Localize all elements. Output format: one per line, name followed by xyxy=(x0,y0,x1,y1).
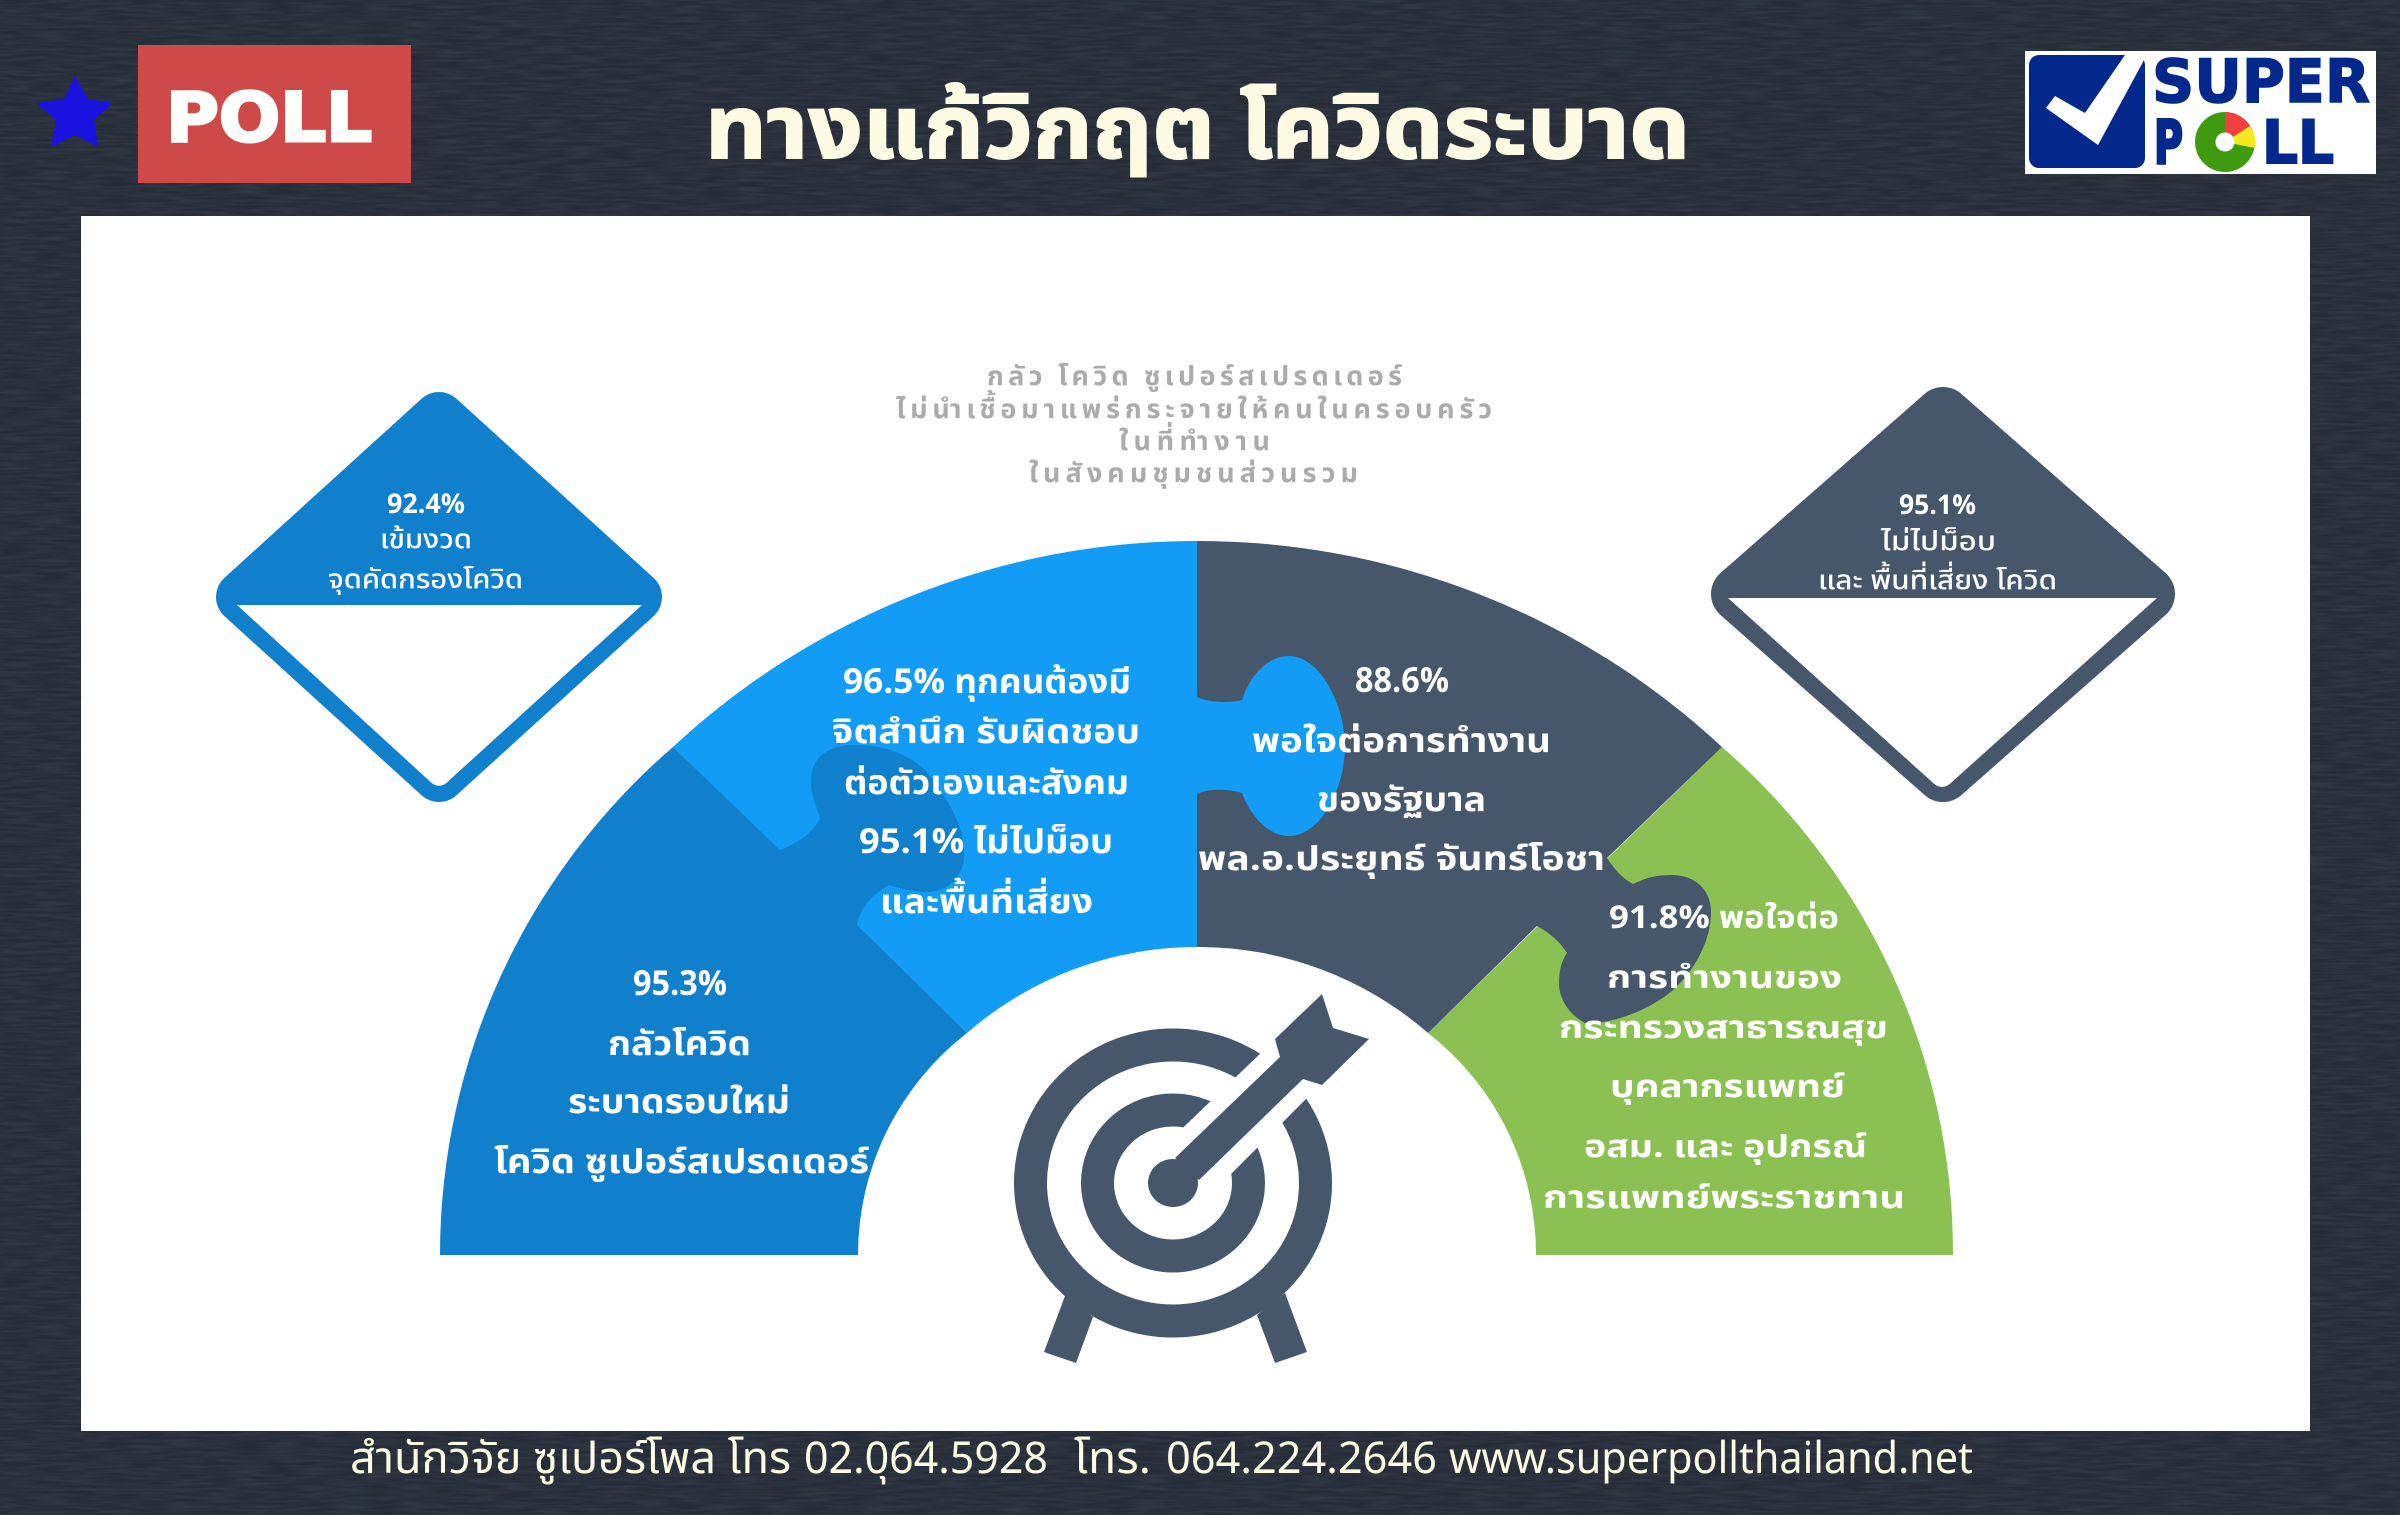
text: light blue segment: 95.1% ไม่ไปม็อบ xyxy=(859,818,1113,869)
diamond: right callout xyxy=(1728,415,2157,787)
text: light blue segment xyxy=(832,658,1140,929)
text: slate segment: พอใจต่อการทำงาน xyxy=(1252,717,1551,768)
puzzle arc: slate segment xyxy=(1197,541,1722,1033)
text: light blue segment: จิตสำนึก รับผิดชอบ xyxy=(832,708,1140,759)
icon: check box xyxy=(2029,54,2146,168)
diamond: left callout xyxy=(237,418,642,786)
diamond: right callout: และ พื้นที่เสี่ยง โควิด xyxy=(1818,561,2057,602)
title: ทางแก้วิกฤต โควิดระบาด xyxy=(705,65,1690,198)
text: dark blue segment xyxy=(494,960,869,1189)
text: dark blue segment: โควิด ซูเปอร์สเปรดเดอร์ xyxy=(494,1138,869,1189)
footer contact line: สำนักวิจัย ซูเปอร์โพล โทร xyxy=(350,1426,791,1493)
text: green segment: การแพทย์พระราชทาน xyxy=(1543,1175,1905,1222)
text: slate segment: พล.อ.ประยุทธ์ จันทร์โอชา xyxy=(1198,835,1605,886)
text: slate segment: 88.6% xyxy=(1355,657,1449,708)
text: dark blue segment: กลัวโควิด xyxy=(608,1020,751,1071)
logo: super poll xyxy=(2025,47,2376,178)
intro text: กลัว โควิด ซูเปอร์สเปรดเดอร์ xyxy=(987,357,1402,398)
puzzle arc: light blue segment xyxy=(673,541,1345,1033)
text: dark blue segment: ระบาดรอบใหม่ xyxy=(568,1078,790,1129)
footer contact line: 02.0ุ64.5928 xyxy=(804,1426,1048,1493)
footer contact line: 064.224.2646 xyxy=(1166,1426,1437,1493)
main white panel xyxy=(81,216,2310,1431)
diamond: left callout: เข้มงวด xyxy=(380,520,472,561)
intro text: ไม่นำเชื้อมาแพร่กระจายให้คนในครอบครัว xyxy=(896,390,1492,431)
logo: super poll: P xyxy=(2154,108,2183,178)
footer contact line: โทร. xyxy=(1074,1426,1151,1493)
text: light blue segment: 96.5% ทุกคนต้องมี xyxy=(843,658,1131,709)
poll badge: POLL xyxy=(166,79,372,158)
text: green segment: 91.8% พอใจต่อ xyxy=(1609,895,1839,942)
intro text: ในที่ทำงาน xyxy=(1119,422,1270,463)
icon: donut chart xyxy=(2195,112,2255,172)
poll badge xyxy=(138,45,411,183)
text: green segment xyxy=(1543,895,1905,1222)
text: slate segment: ของรัฐบาล xyxy=(1317,776,1486,827)
text: green segment: อสม. และ อุปกรณ์ xyxy=(1584,1124,1867,1171)
text: dark blue segment: 95.3% xyxy=(633,960,727,1011)
intro text xyxy=(896,357,1492,495)
diamond: right callout: 95.1% xyxy=(1899,486,1976,527)
diamond: left callout: จุดคัดกรองโควิด xyxy=(328,560,523,601)
puzzle arc: green segment xyxy=(1428,747,1953,1255)
text: light blue segment: และพื้นที่เสี่ยง xyxy=(880,877,1093,929)
footer contact line xyxy=(350,1426,1973,1493)
logo: super poll: SUPER xyxy=(2152,47,2370,117)
diamond: left callout: 92.4% xyxy=(387,485,465,526)
footer contact line: www.superpollthailand.net xyxy=(1449,1426,1973,1493)
text: green segment: กระทรวงสาธารณสุข xyxy=(1559,1005,1888,1052)
text: green segment: การทำงานของ xyxy=(1607,955,1842,1002)
icon: blue star xyxy=(36,76,113,147)
diamond: right callout: ไม่ไปม็อบ xyxy=(1880,522,1996,563)
text: light blue segment: ต่อตัวเองและสังคม xyxy=(844,759,1129,810)
puzzle arc: dark blue segment xyxy=(440,745,967,1255)
intro text: ในสังคมชุมชนส่วนรวม xyxy=(1029,454,1358,495)
logo: super poll: LL xyxy=(2262,108,2334,178)
icon: target with arrow xyxy=(1030,994,1369,1363)
text: slate segment xyxy=(1198,657,1605,886)
text: green segment: บุคลากรแพทย์ xyxy=(1610,1064,1845,1111)
